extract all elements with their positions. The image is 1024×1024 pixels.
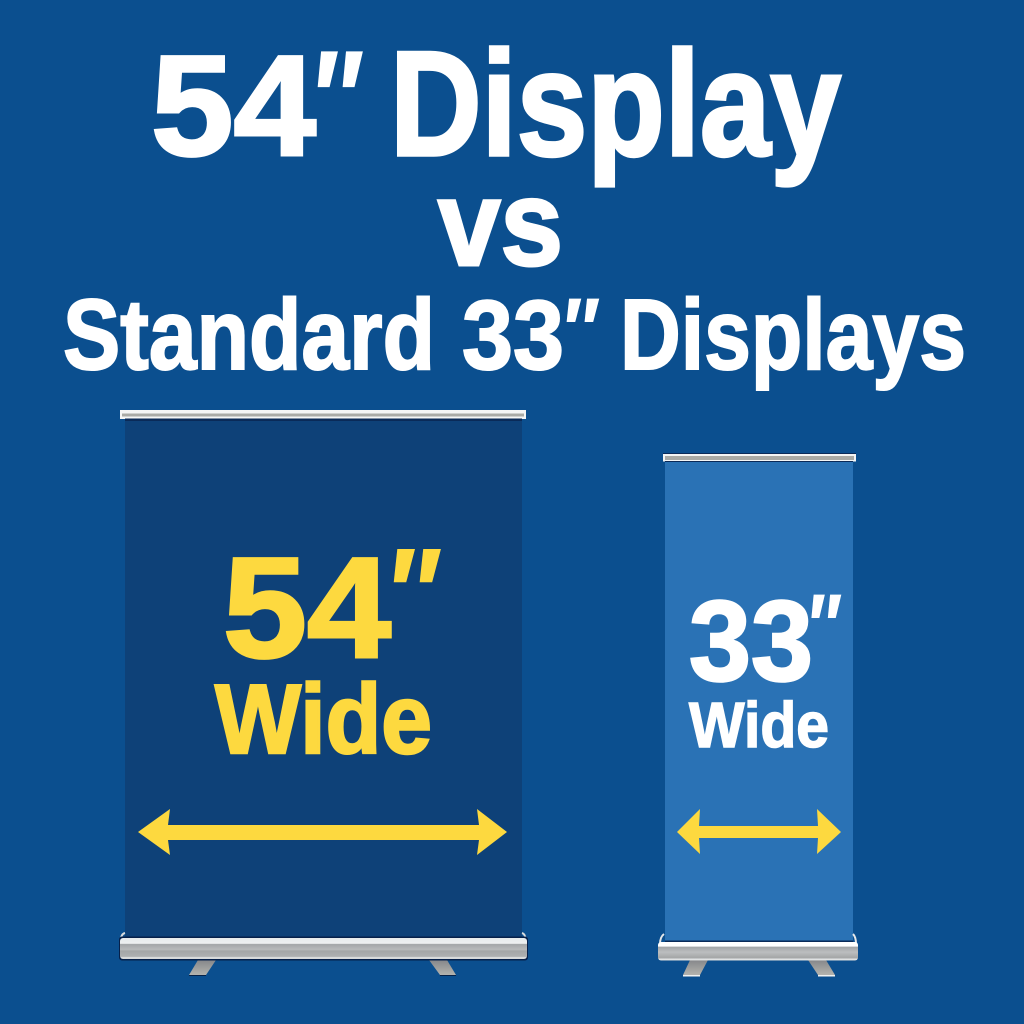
label: 54 inch wide [215, 524, 442, 774]
number: 54 inch: 54 [223, 529, 391, 688]
top rail [120, 410, 526, 421]
banner panel: 33 inch [665, 461, 853, 942]
title line: standard 33 inch displays: Displays [620, 279, 966, 391]
end caps [121, 933, 526, 940]
title line: standard 33 inch displays: Standard [63, 279, 435, 391]
base cassette [119, 933, 528, 976]
small 33 inch banner stand [658, 453, 858, 976]
title line: standard 33 inch displays [63, 279, 966, 391]
title line: 54 inch display [151, 20, 841, 187]
arrow: 54 inch width [138, 809, 507, 855]
word: wide: Wide [689, 689, 829, 761]
title line: 54 inch display: Display [390, 20, 841, 187]
number: 54 inch: ″ [390, 524, 442, 663]
base cassette [658, 934, 858, 976]
banner panel: 54 inch [125, 418, 522, 938]
stand feet [189, 960, 456, 976]
large 54 inch banner stand [119, 410, 528, 976]
title line: vs: vs [438, 155, 563, 291]
label: 33 inch wide [689, 576, 842, 761]
title line: 54 inch display: 54 [151, 27, 316, 186]
arrow: 33 inch width [677, 809, 841, 854]
title line: standard 33 inch displays: ″ [564, 280, 600, 379]
title line: 54 inch display: ″ [314, 23, 364, 174]
title line: standard 33 inch displays: 33 [462, 280, 564, 390]
top rail [663, 453, 856, 462]
title [63, 20, 966, 391]
stand feet [683, 960, 835, 976]
number: 33 inch: ″ [809, 576, 842, 675]
number: 33 inch: 33 [689, 578, 813, 705]
end caps [660, 934, 856, 944]
word: wide: Wide [215, 664, 432, 774]
